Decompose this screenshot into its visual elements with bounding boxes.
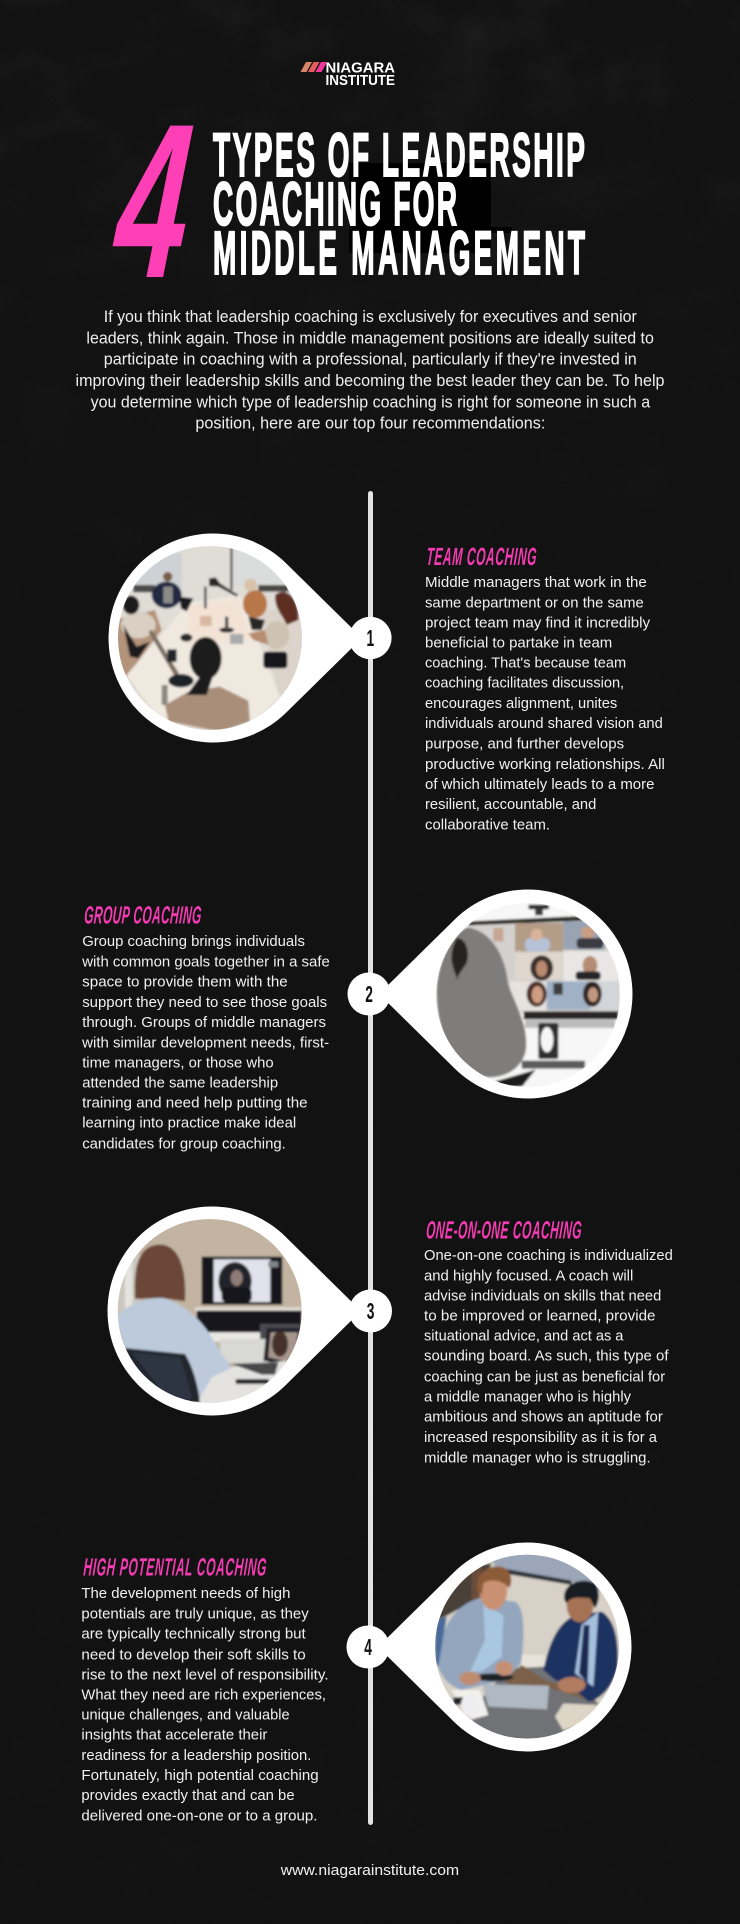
body text: one-on-one coaching: ambitious and shows an aptitude for [424,1409,663,1426]
number badge 2: 2 [365,983,373,1008]
body text: team coaching: project team may find it incredibly [425,614,651,631]
body text: team coaching: individuals around shared vision and [425,715,663,732]
body text: high potential coaching: readiness for a leadership position. [81,1747,311,1764]
body text: group coaching: space to provide them with the [82,974,288,991]
intro paragraph: improving their leadership skills and becoming the best leader they can be. To help [76,371,664,390]
body text: group coaching: with similar development needs, first- [81,1034,329,1051]
number badge 1 [349,617,392,659]
body text: group coaching: Group coaching brings individuals [82,933,305,950]
body text: high potential coaching: need to develop their soft skills to [81,1646,306,1663]
body text: one-on-one coaching: and highly focused. A coach will [424,1267,633,1284]
body text: one-on-one coaching: middle manager who is struggling. [424,1449,651,1466]
photo: team at a long table [115,543,308,733]
body text: high potential coaching: insights that accelerate their [81,1727,267,1744]
big pink numeral 4: 4 [106,79,200,325]
heading: group coaching: GROUP COACHING [83,902,202,930]
photo: woman on a video call [115,1214,305,1411]
body text: high potential coaching: unique challenges, and valuable [81,1707,290,1724]
item 4: high potential coaching [81,1542,631,1824]
heading: one-on-one coaching: ONE-ON-ONE COACHING [425,1217,583,1245]
body text: high potential coaching: What they need are rich experiences, [81,1686,326,1703]
body text: team coaching: coaching. That's because team [425,655,626,672]
body text: high potential coaching: potentials are truly unique, as they [81,1605,309,1622]
item 2: group coaching [81,890,632,1152]
body text: group coaching: time managers, or those who [82,1054,274,1071]
logo: Niagara Institute: INSTITUTE [326,73,395,89]
body text: team coaching: purpose, and further develops [425,736,624,753]
body text: high potential coaching: are typically technically strong but [81,1626,307,1643]
footer website: www.niagarainstitute.com [280,1862,459,1879]
intro paragraph: leaders, think again. Those in middle management positions are ideally suited to [86,328,654,348]
timeline vertical line [368,491,373,1825]
body text: group coaching: training and need help putting the [82,1095,308,1112]
teardrop bubble 4 [378,1542,631,1752]
body text: one-on-one coaching: advise individuals on skills that need [424,1287,661,1304]
title [213,122,585,288]
body text: one-on-one coaching: coaching can be just as beneficial for [424,1368,665,1385]
body text: one-on-one coaching: increased responsibility as it is for a [424,1429,658,1446]
body text: team coaching: encourages alignment, unites [425,695,617,712]
heading: high potential coaching: HIGH POTENTIAL COACHING [83,1554,267,1582]
body text: one-on-one coaching: situational advice, and act as a [424,1328,624,1345]
number badge 1: 1 [366,627,375,652]
body text: team coaching: collaborative team. [425,816,550,833]
number badge 2 [348,972,390,1016]
title: COACHING FOR [213,171,457,239]
teardrop bubble 1 [109,533,362,742]
body text: group coaching: candidates for group coaching. [82,1135,286,1152]
heading: team coaching: TEAM COACHING [426,543,537,571]
body text: team coaching [425,574,665,833]
logo: Niagara Institute: NIAGARA [326,60,396,76]
intro paragraph: participate in coaching with a professional, particularly if they're invested in [104,350,637,368]
body text: group coaching [81,933,330,1152]
body text: group coaching: attended the same leadership [82,1074,278,1091]
body text: team coaching: beneficial to partake in team [425,635,612,652]
body text: high potential coaching: provides exactly that and can be [81,1787,295,1804]
logo: Niagara Institute [300,60,396,89]
body text: group coaching: through. Groups of middle managers [82,1014,326,1031]
number badge 4 [346,1626,390,1668]
intro paragraph: you determine which type of leadership coaching is right for someone in such a [91,392,651,412]
body text: team coaching: resilient, accountable, and [425,796,596,813]
intro paragraph [76,307,664,432]
body text: one-on-one coaching: One-on-one coaching is individualized [424,1247,673,1264]
body text: one-on-one coaching: a middle manager who is highly [424,1389,631,1406]
body text: group coaching: with common goals together in a safe [81,954,330,971]
photo: video call on a monitor [436,903,620,1087]
dark patch behind title [349,163,512,253]
number badge 3: 3 [367,1300,374,1325]
body text: high potential coaching [81,1585,329,1824]
teardrop bubble 2 [379,890,632,1098]
intro paragraph: If you think that leadership coaching is exclusively for executives and senior [104,307,637,326]
body text: team coaching: productive working relationships. All [425,756,665,773]
title: TYPES OF LEADERSHIP [213,122,585,190]
teardrop bubble 3 [108,1206,361,1416]
body text: high potential coaching: The development needs of high [81,1585,290,1602]
body text: high potential coaching: Fortunately, high potential coaching [81,1767,319,1784]
photo: two men reviewing a tablet [435,1554,619,1739]
body text: team coaching: of which ultimately leads to a more [425,776,654,793]
background: chalkboard texture [1,0,722,193]
number badge 4: 4 [364,1636,372,1661]
body text: high potential coaching: rise to the next level of responsibility. [81,1666,329,1683]
body text: team coaching: Middle managers that work in the [425,574,647,591]
intro paragraph: position, here are our top four recommendations: [195,414,545,432]
item 1: team coaching [109,533,665,833]
body text: one-on-one coaching: sounding board. As such, this type of [424,1348,669,1365]
title: MIDDLE MANAGEMENT [213,220,585,288]
body text: group coaching: support they need to see those goals [82,994,327,1011]
body text: group coaching: learning into practice make ideal [82,1115,296,1132]
body text: high potential coaching: delivered one-on-one or to a group. [81,1807,318,1824]
body text: team coaching: same department or on the same [425,594,644,611]
item 3: one-on-one coaching [108,1206,673,1466]
number badge 3 [349,1290,392,1332]
body text: one-on-one coaching: to be improved or learned, provide [424,1308,656,1325]
body text: team coaching: coaching facilitates discussion, [425,675,624,692]
body text: one-on-one coaching [424,1247,673,1466]
